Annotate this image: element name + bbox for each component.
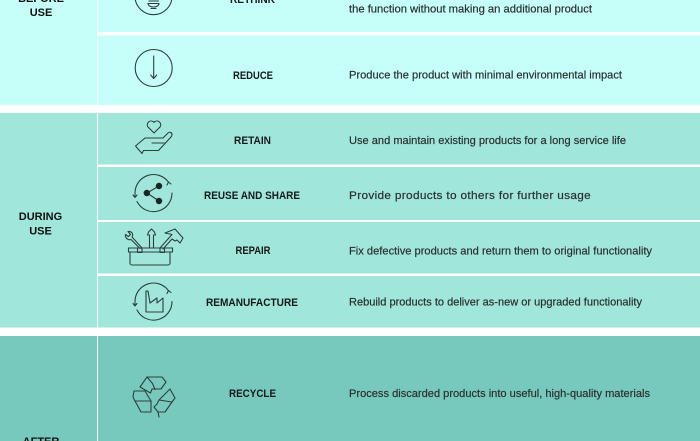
icon: reduce arrow <box>135 50 172 86</box>
icon: repair toolbox <box>125 229 183 265</box>
row: reuse and share <box>98 167 700 220</box>
stage label: during use: USE <box>29 226 52 238</box>
label: reduce: REDUCE <box>233 70 273 82</box>
description: remanufacture: Rebuild products to deliver as-new or upgraded functionality <box>349 296 642 308</box>
label: recycle: RECYCLE <box>229 388 276 400</box>
panel: before use <box>0 0 700 105</box>
description: repair: Fix defective products and return them to original functionality <box>349 246 652 258</box>
description: rethink: the function without making an additional product <box>349 4 592 16</box>
row: repair <box>98 222 700 274</box>
icon: recycle <box>133 377 175 417</box>
icon: reuse and share <box>133 175 172 212</box>
row: rethink <box>98 0 700 32</box>
row: retain <box>98 113 700 164</box>
description: reduce: Produce the product with minimal environmental impact <box>349 70 622 82</box>
stage cell: before use <box>0 0 97 105</box>
panel: after use <box>0 336 700 441</box>
label: retain: RETAIN <box>234 135 271 147</box>
description: reuse and share: Provide products to others for further usage <box>349 190 591 202</box>
icon: retain hand and heart <box>136 121 172 154</box>
label: reuse and share: REUSE AND SHARE <box>204 190 300 202</box>
row: recycle <box>98 336 700 441</box>
description: retain: Use and maintain existing products for a long service life <box>349 135 626 147</box>
label: repair: REPAIR <box>236 245 271 257</box>
row: remanufacture <box>98 276 700 328</box>
icon: remanufacture factory <box>133 283 172 320</box>
description: recycle: Process discarded products into useful, high-quality materials <box>349 388 651 400</box>
stage cell: after use <box>0 336 97 441</box>
row: reduce <box>98 36 700 105</box>
label: remanufacture: REMANUFACTURE <box>206 297 298 309</box>
stage label: during use: DURING <box>19 211 62 223</box>
stage cell: during use <box>0 113 97 328</box>
panel: during use <box>0 113 700 328</box>
stage label: before use: USE <box>30 7 52 19</box>
icon: rethink lightbulb <box>135 0 172 15</box>
